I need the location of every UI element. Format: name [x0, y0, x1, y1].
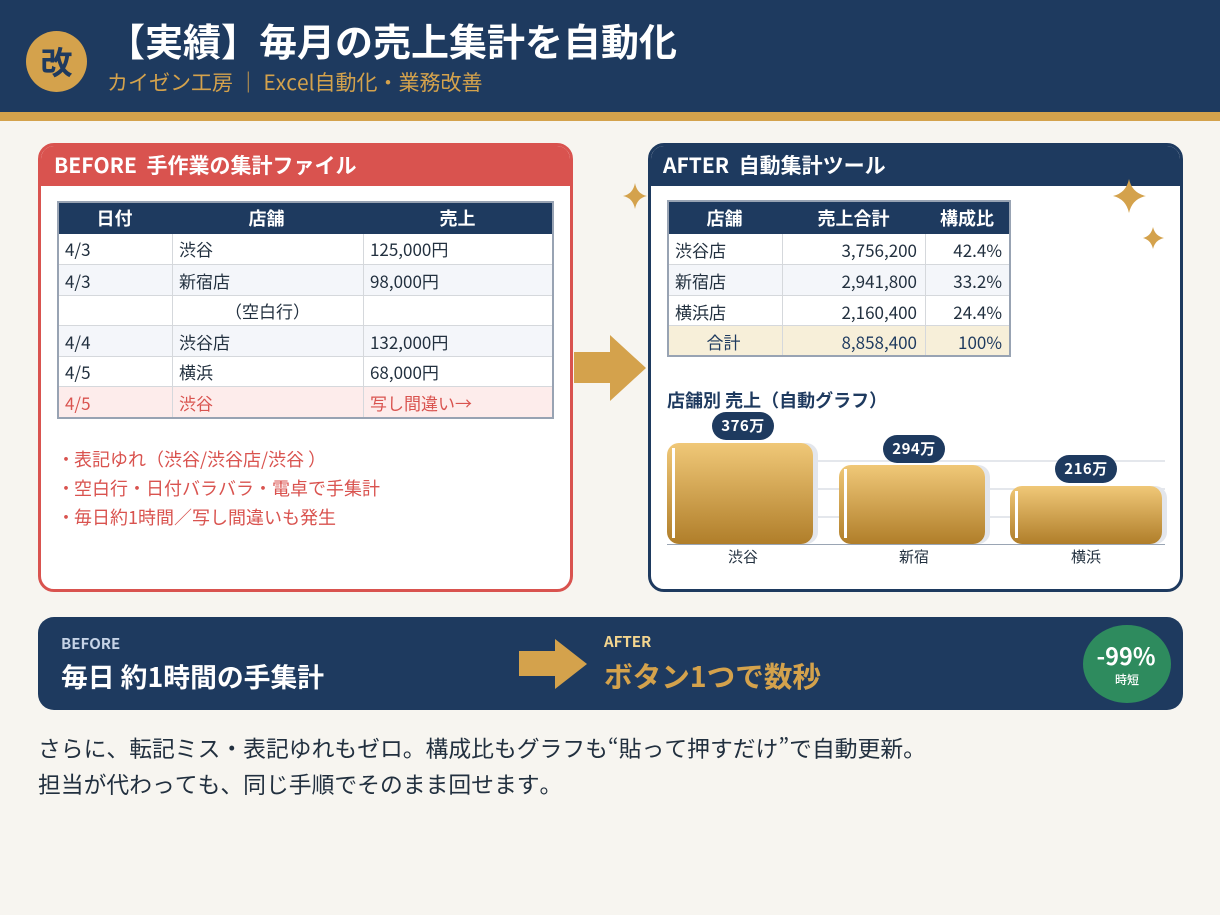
- arrow: banner: [519, 639, 587, 689]
- arrow: before to after: [574, 335, 646, 401]
- table: before data: 4/5: [65, 359, 91, 384]
- table: after summary: 42.4%: [953, 237, 1002, 262]
- before issues list: ・: [57, 504, 75, 530]
- table: before data: 渋谷: [179, 236, 213, 261]
- before issues list: ・: [57, 475, 75, 501]
- table: after summary: 売上合計: [818, 205, 890, 231]
- icon: logo badge: 改: [40, 38, 72, 84]
- value: yokohama: [1055, 455, 1117, 483]
- table: after summary: 2,941,800: [842, 268, 917, 293]
- icon: sparkles: [623, 179, 1164, 249]
- table: after summary: 新宿店: [675, 268, 726, 293]
- after panel heading: [648, 143, 1183, 186]
- before issues list: 表記ゆれ（渋谷/渋谷店/渋谷 ）: [74, 446, 326, 472]
- value: yokohama: 216万: [1064, 458, 1108, 479]
- table: after summary: 3,756,200: [842, 237, 917, 262]
- table: after summary: 2,160,400: [842, 299, 917, 324]
- after label: AFTER: [604, 631, 651, 652]
- before issues list: 空白行・日付バラバラ・電卓で手集計: [74, 475, 380, 501]
- label: shibuya: 渋谷: [728, 546, 758, 567]
- before panel heading: [38, 143, 573, 186]
- table: before data: 渋谷: [179, 390, 213, 415]
- chart heading: 店舗別 売上（自動グラフ）: [667, 387, 887, 413]
- header band: [0, 0, 1220, 121]
- summary text: [38, 731, 926, 800]
- summary text: 担当が代わっても、同じ手順でそのまま回せます。: [38, 767, 562, 800]
- table: after summary: 店舗: [706, 205, 742, 231]
- bar: shibuya: [667, 443, 813, 544]
- table: after summary: 100%: [958, 329, 1002, 354]
- label: shinjuku: 新宿: [899, 546, 929, 567]
- table: before data: 横浜: [179, 359, 213, 384]
- panel: result banner: [38, 617, 1183, 710]
- table: after summary: 8,858,400: [842, 329, 917, 354]
- table: after summary: 横浜店: [675, 299, 726, 324]
- subtitle: カイゼン工房 ｜ Excel自動化・業務改善: [107, 67, 483, 97]
- bar: shinjuku: [838, 465, 984, 544]
- badge value: -99%: [1096, 638, 1156, 672]
- table: before data: 4/3: [65, 236, 91, 261]
- value: shinjuku: 294万: [892, 438, 936, 459]
- value: shinjuku: [883, 435, 945, 463]
- summary text: さらに、転記ミス・表記ゆれもゼロ。構成比もグラフも“貼って押すだけ”で自動更新。: [38, 731, 926, 764]
- before issues list: ・: [57, 446, 75, 472]
- before text: 毎日 約1時間の手集計: [61, 656, 324, 695]
- table: before data: 4/4: [65, 329, 91, 354]
- table: before data: 売上: [440, 205, 476, 231]
- title: 【実績】毎月の売上集計を自動化: [107, 12, 677, 67]
- table: before data: 125,000円: [370, 236, 448, 261]
- table: before data: [57, 201, 554, 419]
- table: before data: 日付: [96, 205, 132, 231]
- after panel heading: AFTER 自動集計ツール: [663, 150, 886, 180]
- table: after summary: 渋谷店: [675, 237, 726, 262]
- table: before data: 98,000円: [370, 268, 439, 293]
- after text: ボタン1つで数秒: [604, 655, 821, 696]
- before issues list: [57, 446, 380, 530]
- table: before data: 店舗: [248, 205, 284, 231]
- before issues list: 毎日約1時間／写し間違いも発生: [74, 504, 336, 530]
- icon: logo badge: [26, 31, 87, 92]
- before label: BEFORE: [61, 633, 120, 654]
- table: before data: 4/3: [65, 268, 91, 293]
- badge caption: 時短: [1115, 671, 1139, 688]
- label: yokohama: 横浜: [1071, 546, 1101, 567]
- table: before data: 新宿店: [179, 268, 230, 293]
- table: before data: 渋谷店: [179, 329, 230, 354]
- table: before data: 68,000円: [370, 359, 439, 384]
- table: after summary: 24.4%: [953, 299, 1002, 324]
- value: shibuya: 376万: [721, 415, 765, 436]
- before panel heading: BEFORE 手作業の集計ファイル: [54, 150, 356, 180]
- table: before data: 132,000円: [370, 329, 448, 354]
- panel: after: [648, 143, 1183, 592]
- table: after summary: 構成比: [940, 205, 994, 231]
- table: before data: （空白行）: [225, 298, 310, 323]
- table: before data: 4/5: [65, 390, 91, 415]
- table: before data: 写し間違い→: [370, 390, 472, 415]
- table: after summary: 合計: [706, 329, 740, 354]
- table: after summary: [667, 200, 1011, 357]
- panel: before: [38, 143, 573, 592]
- bar chart: store sales: [667, 460, 1165, 545]
- bar: yokohama: [1010, 486, 1162, 544]
- value: shibuya: [712, 412, 774, 440]
- badge: time reduction: [1083, 625, 1171, 703]
- table: after summary: 33.2%: [953, 268, 1002, 293]
